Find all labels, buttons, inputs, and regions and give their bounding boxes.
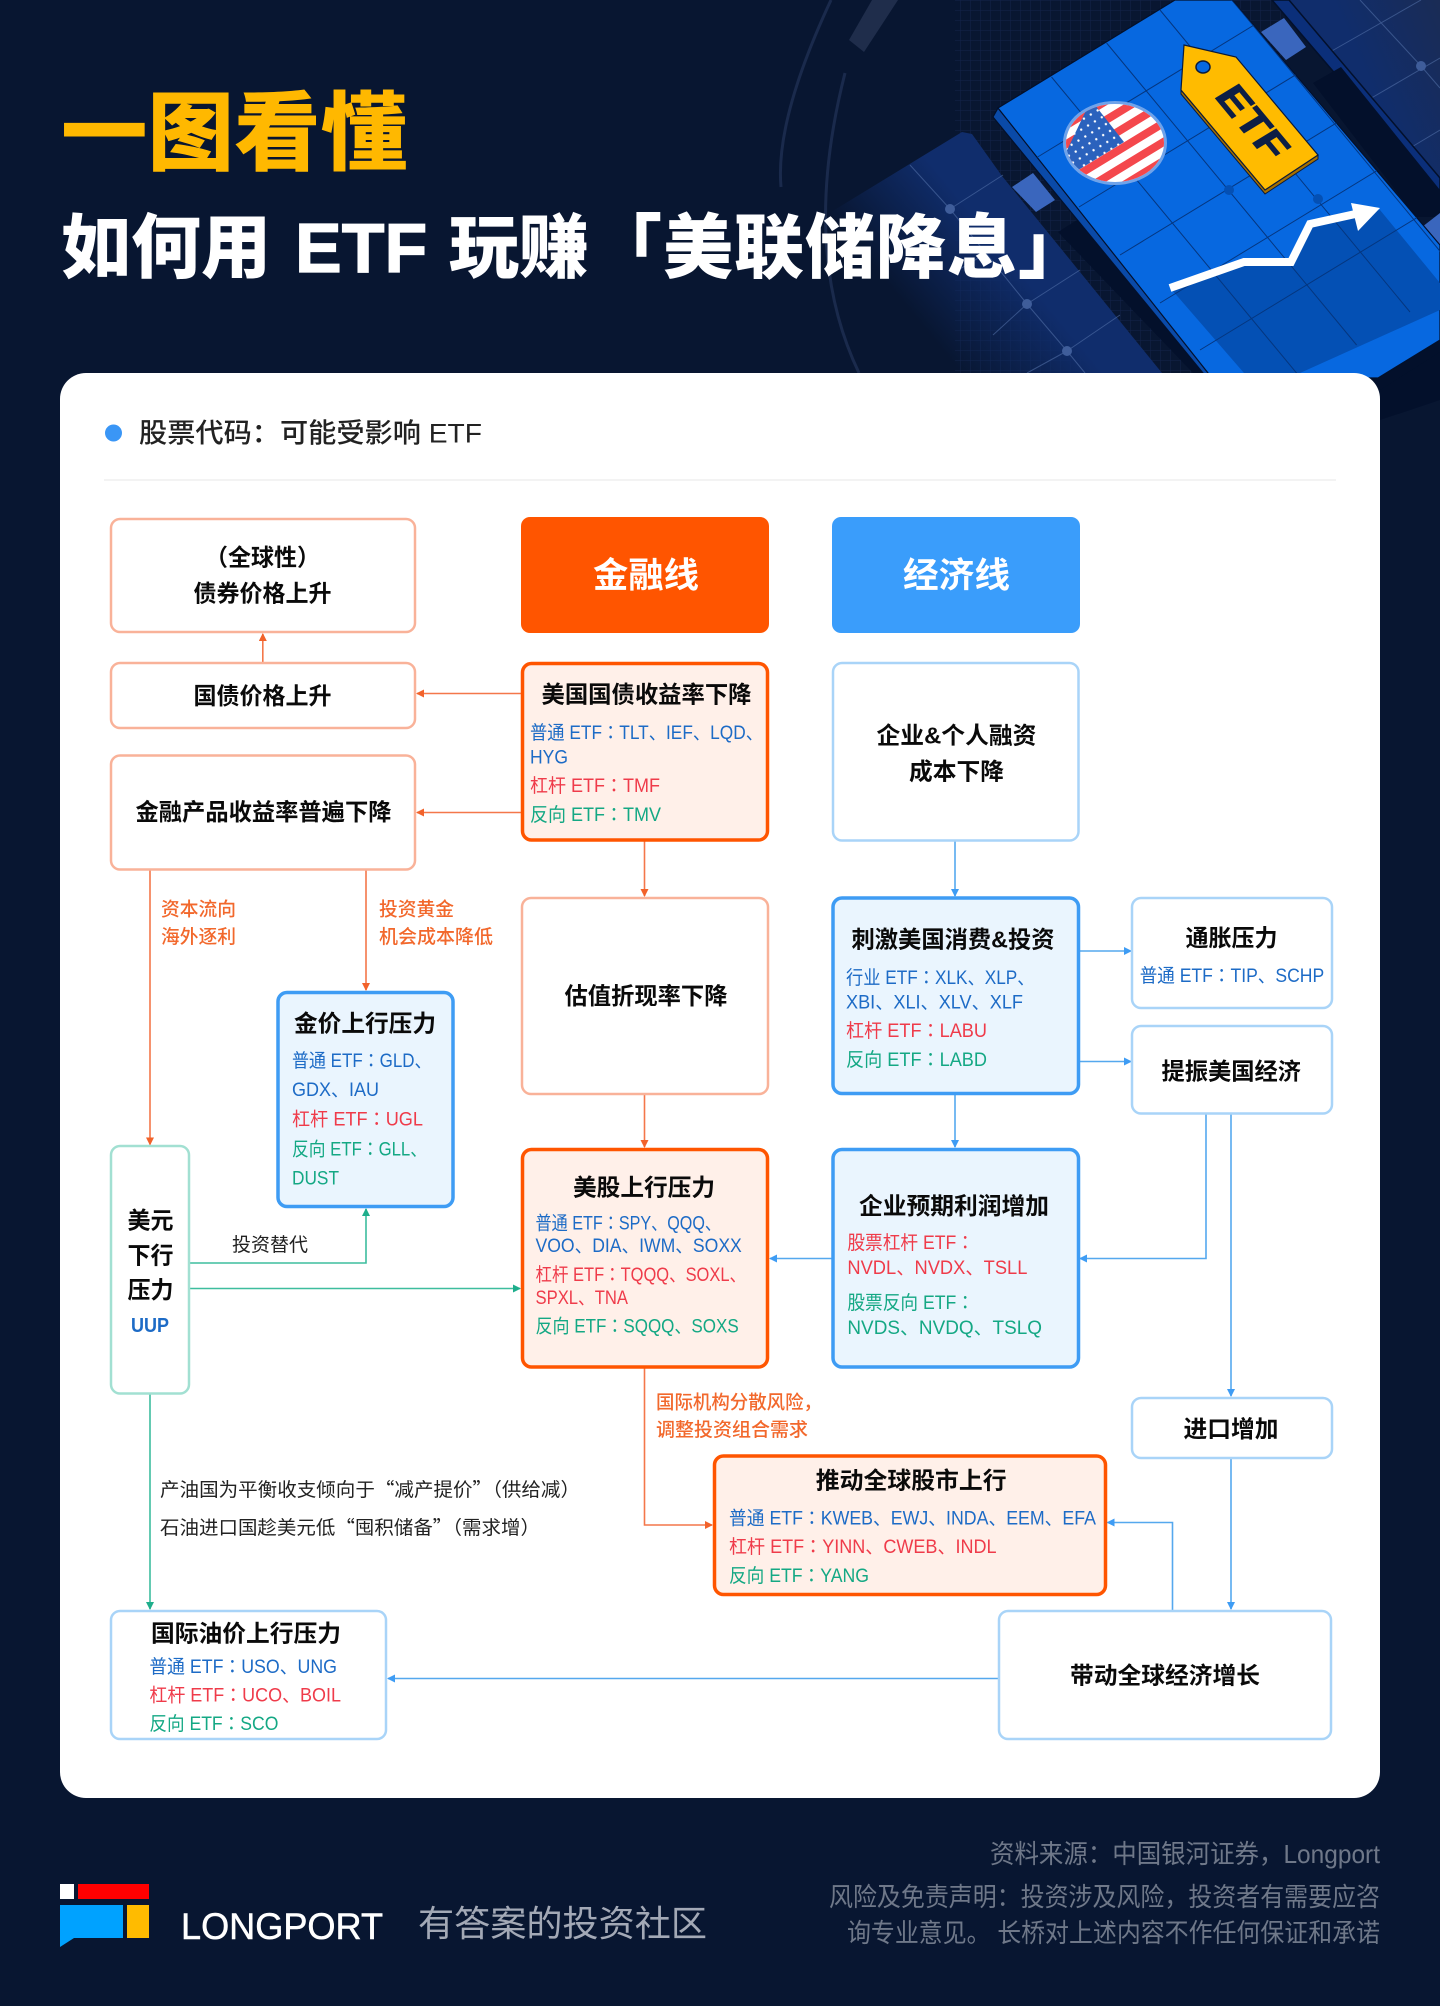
label: capital outflow	[161, 898, 236, 948]
box: US equities pressure: 普通 ETF：SPY、QQQ、	[536, 1212, 721, 1234]
box: inflation pressure: 通胀压力	[1186, 925, 1278, 951]
arrow: equities to global equities	[644, 1368, 712, 1525]
arrow: products to gold	[365, 870, 367, 990]
box: US treasury yield: 美国国债收益率下降	[542, 682, 752, 708]
box: US equities pressure	[522, 1150, 768, 1367]
arrow: global growth to global equities	[1108, 1522, 1172, 1610]
source and disclaimer: 风险及免责声明：投资涉及风险，投资者有需要应咨	[829, 1882, 1380, 1912]
box: stimulus: 刺激美国消费&投资	[852, 926, 1054, 952]
box: oil pressure: 普通 ETF：USO、UNG	[149, 1656, 337, 1678]
label: gold opportunity cost	[379, 898, 493, 948]
main card side edge	[993, 108, 1222, 384]
box: US equities pressure: 杠杆 ETF：TQQQ、SOXL、	[536, 1264, 746, 1286]
box: gold pressure: 金价上行压力	[294, 1010, 436, 1036]
box: global equities: 杠杆 ETF：YINN、CWEB、INDL	[729, 1536, 997, 1558]
arrow: valuation to equities	[644, 1094, 646, 1147]
icon: rising arrow	[1170, 203, 1380, 288]
box: gold pressure	[278, 992, 453, 1206]
box: imports increase	[1132, 1398, 1332, 1458]
dark strip beside right card	[1272, 0, 1440, 196]
label: oil producers and importers: 产油国为平衡收支倾向于“减产提价”（供给减）	[160, 1475, 580, 1502]
label: oil producers and importers	[160, 1475, 580, 1540]
box: US dollar: 压力	[128, 1277, 174, 1303]
box: oil pressure: 杠杆 ETF：UCO、BOIL	[149, 1685, 341, 1707]
box: stimulus: 杠杆 ETF：LABU	[846, 1020, 987, 1042]
box: corporate profit: 股票反向 ETF：	[847, 1292, 974, 1314]
box: global equities	[714, 1456, 1106, 1594]
label: investment substitute: 投资替代	[232, 1230, 308, 1257]
box: financing cost: 企业&个人融资	[876, 722, 1036, 748]
source and disclaimer: 资料来源：中国银河证券，Longport	[990, 1839, 1381, 1869]
label: capital outflow: 资本流向	[161, 898, 236, 920]
arrow: boost economy to profit	[1080, 1114, 1206, 1258]
icon: US flag	[1063, 101, 1167, 185]
box: global bond prices	[111, 519, 415, 632]
title line 2: 如何用	[61, 209, 271, 287]
box: corporate profit: NVDL、NVDX、TSLL	[847, 1258, 1027, 1279]
header: economic line: 经济线	[903, 556, 1010, 596]
connector tabs	[1012, 173, 1055, 212]
box: stimulus: XBI、XLI、XLV、XLF	[846, 992, 1023, 1013]
box: US equities pressure: 反向 ETF：SQQQ、SOXS	[536, 1316, 739, 1338]
label: international institutions: 国际机构分散风险，	[656, 1392, 822, 1414]
box: US equities pressure: 美股上行压力	[573, 1174, 715, 1200]
box: US equities pressure: VOO、DIA、IWM、SOXX	[536, 1236, 742, 1257]
arrow: yield to financial products	[417, 812, 522, 814]
box: corporate profit: NVDS、NVDQ、TSLQ	[847, 1318, 1042, 1339]
box: US treasury yield: HYG	[530, 748, 568, 768]
shadow band left	[1058, 215, 1240, 395]
brand name: LONGPORT	[181, 1906, 383, 1947]
header: economic line	[832, 517, 1080, 633]
box: inflation pressure: 普通 ETF：TIP、SCHP	[1140, 965, 1324, 987]
icon: Longport logo	[60, 1884, 149, 1947]
shadow band right	[1313, 67, 1440, 217]
title line 1: 一图看懂	[61, 86, 407, 182]
hero illustration: ETF tablet cards	[780, 0, 1440, 420]
box: corporate profit: 企业预期利润增加	[859, 1193, 1049, 1219]
box: US dollar: 下行	[128, 1242, 174, 1268]
box: global equities: 推动全球股市上行	[816, 1468, 1007, 1494]
icon: ETF price tag: ETF	[1206, 78, 1298, 167]
arrow: yield to valuation	[644, 841, 646, 896]
box: gold pressure: 反向 ETF：GLL、	[292, 1139, 427, 1161]
arrow: products to dollar	[149, 870, 151, 1144]
box: gold pressure: 杠杆 ETF：UGL	[292, 1109, 423, 1131]
box: inflation pressure	[1132, 898, 1332, 1008]
slogan: 有答案的投资社区	[418, 1903, 707, 1944]
source and disclaimer	[829, 1839, 1381, 1948]
title line 2: 玩赚	[449, 209, 589, 287]
label: oil producers and importers: 石油进口国趁美元低“囤积储备”（需求增）	[160, 1513, 540, 1540]
arrow: dollar to gold	[190, 1209, 366, 1263]
box: treasury price: 国债价格上升	[194, 683, 332, 709]
label: international institutions: 调整投资组合需求	[656, 1419, 808, 1441]
box: global equities: 普通 ETF：KWEB、EWJ、INDA、EEM、EFA	[729, 1508, 1096, 1530]
box: US dollar: UUP	[131, 1315, 169, 1337]
title line 2: ETF	[295, 209, 427, 287]
arrow: yield to treasury price	[417, 692, 522, 694]
arrow: stimulus to profit	[954, 1094, 956, 1147]
box: gold pressure: 普通 ETF：GLD、	[292, 1050, 432, 1072]
box: stimulus	[833, 898, 1078, 1094]
box: US equities pressure: SPXL、TNA	[536, 1288, 628, 1309]
box: global growth: 带动全球经济增长	[1070, 1662, 1260, 1688]
arrow: financing cost to stimulus	[954, 841, 956, 896]
box: US dollar: 美元	[128, 1208, 174, 1234]
box: global equities: 反向 ETF：YANG	[729, 1565, 869, 1587]
box: financial product yields	[111, 756, 415, 870]
box: boost US economy: 提振美国经济	[1162, 1058, 1301, 1084]
box: global bond prices: （全球性）	[205, 544, 320, 570]
box: gold pressure: GDX、IAU	[292, 1080, 379, 1101]
main card surface	[998, 0, 1440, 378]
label: capital outflow: 海外逐利	[161, 926, 236, 948]
box: boost US economy	[1132, 1026, 1332, 1114]
arrow: boost economy to imports	[1230, 1114, 1232, 1396]
box: US dollar	[111, 1146, 189, 1394]
label: international institutions	[656, 1392, 822, 1441]
header: financial line	[521, 517, 769, 633]
box: valuation discount rate	[522, 898, 768, 1094]
box: treasury price	[111, 663, 415, 728]
box: gold pressure: DUST	[292, 1169, 339, 1190]
source and disclaimer: 询专业意见。 长桥对上述内容不作任何保证和承诺	[847, 1918, 1380, 1948]
icon: ETF price tag	[1181, 45, 1318, 194]
legend: stock code note: 股票代码：可能受影响 ETF	[139, 418, 482, 448]
box: corporate profit	[833, 1150, 1078, 1367]
title line 2: 「美联储降息」	[592, 209, 1089, 287]
arrow: treasury price to bond price	[262, 634, 264, 662]
box: valuation discount rate: 估值折现率下降	[564, 983, 728, 1009]
chart area under arrow	[1172, 210, 1440, 373]
box: financing cost	[833, 663, 1078, 840]
box: imports increase: 进口增加	[1184, 1416, 1278, 1442]
main white panel	[60, 373, 1380, 798]
box: financing cost: 成本下降	[909, 758, 1005, 784]
box: US treasury yield: 反向 ETF：TMV	[530, 804, 661, 826]
arrow: global growth to oil	[388, 1678, 998, 1680]
box: oil pressure: 国际油价上行压力	[151, 1620, 341, 1646]
box: oil pressure: 反向 ETF：SCO	[149, 1713, 278, 1735]
header: financial line: 金融线	[593, 556, 699, 596]
box: financial product yields: 金融产品收益率普遍下降	[136, 798, 392, 825]
arrow: dollar to equities	[190, 1288, 520, 1290]
box: global growth	[999, 1611, 1331, 1739]
box: stimulus: 行业 ETF：XLK、XLP、	[846, 967, 1034, 989]
main card grid	[1036, 0, 1440, 379]
icon: right background card	[1289, 0, 1440, 178]
box: oil pressure	[111, 1611, 386, 1739]
box: global bond prices: 债券价格上升	[194, 580, 332, 606]
arrow: dollar to oil	[149, 1394, 151, 1609]
arrow: stimulus to inflation	[1079, 950, 1131, 952]
arrow: stimulus to boost economy	[1079, 1060, 1131, 1062]
label: gold opportunity cost: 机会成本降低	[379, 926, 493, 948]
box: US treasury yield	[522, 664, 768, 840]
box: US treasury yield: 普通 ETF：TLT、IEF、LQD、	[530, 722, 763, 744]
arrow: profit to equities	[770, 1258, 832, 1260]
box: corporate profit: 股票杠杆 ETF：	[847, 1232, 974, 1254]
label: gold opportunity cost: 投资黄金	[379, 898, 454, 920]
box: stimulus: 反向 ETF：LABD	[846, 1049, 987, 1071]
arrow: imports to global growth	[1230, 1459, 1232, 1609]
box: US treasury yield: 杠杆 ETF：TMF	[530, 775, 660, 797]
icon: left background card	[800, 132, 1162, 373]
